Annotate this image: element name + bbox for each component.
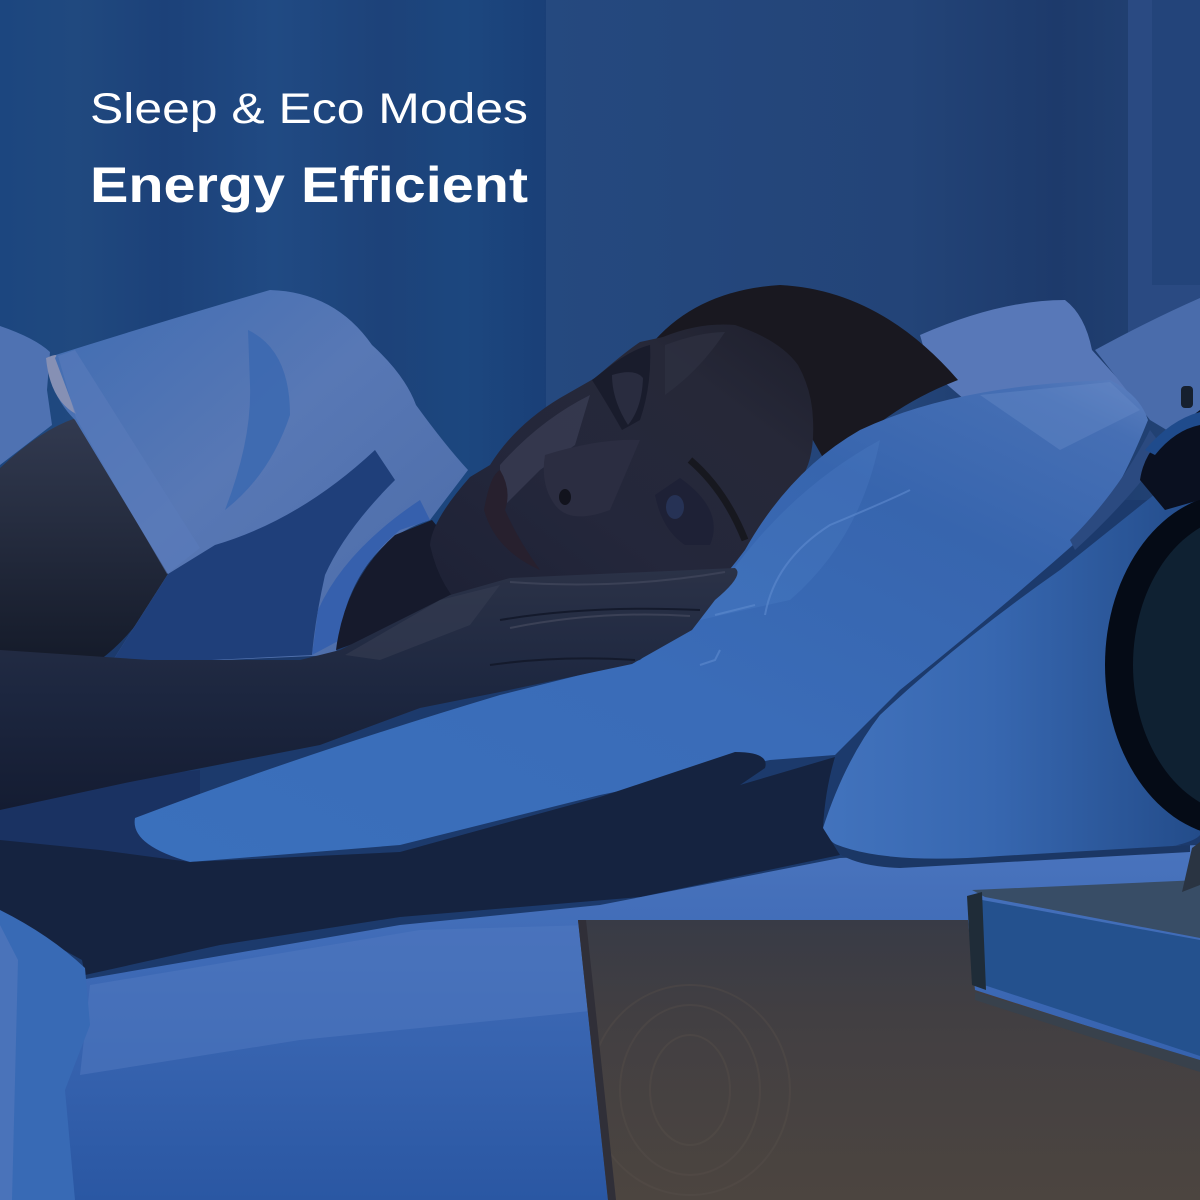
under-body shadow <box>0 770 200 870</box>
foreground bedding fold <box>0 910 90 1200</box>
finger lines <box>490 609 700 665</box>
upper eye socket <box>592 345 650 430</box>
heading: Energy Efficient: Energy Efficient <box>90 157 528 213</box>
bed sheet light patch <box>80 925 600 1075</box>
t-shirt <box>46 290 468 665</box>
neckline highlight <box>312 500 430 655</box>
finger highlights <box>510 572 725 628</box>
table left strip <box>578 920 616 1200</box>
fold highlight <box>0 925 18 1200</box>
lower eye <box>655 478 714 545</box>
blanket at left <box>0 326 52 465</box>
alarm clock <box>1105 386 1200 892</box>
sleeping woman <box>0 285 958 870</box>
nose <box>544 440 640 516</box>
upper arm <box>0 418 168 660</box>
lower torso shadow <box>110 450 395 665</box>
bed sheet <box>0 845 1200 1200</box>
lips <box>484 470 540 570</box>
hair <box>655 285 958 470</box>
face <box>430 324 813 615</box>
book <box>967 880 1200 1072</box>
background: curtain and wall <box>0 0 1200 560</box>
table wood grain <box>643 984 750 1006</box>
back pillow <box>920 300 1130 430</box>
nostril <box>559 489 571 505</box>
pillow crease highlights <box>700 490 910 665</box>
second pillow shadow <box>823 838 1190 868</box>
eyebrow <box>690 460 745 540</box>
lower arm <box>0 752 840 975</box>
pillow corner light <box>980 382 1140 450</box>
bedside table <box>578 920 1200 1200</box>
pillow upper-left glow <box>700 440 880 620</box>
far right pillow <box>1095 298 1200 450</box>
sleeve inner hem <box>46 355 76 414</box>
chest <box>336 520 490 650</box>
main pillow <box>135 380 1148 862</box>
cheek sheen <box>500 395 590 510</box>
sleeve fold <box>225 330 290 510</box>
upper eyelid <box>612 372 643 425</box>
crease between pillows <box>1070 430 1165 550</box>
temple sheen <box>665 332 725 395</box>
eyelid glint <box>666 495 684 519</box>
sleeve band <box>58 350 200 574</box>
upper forearm and hand <box>0 568 738 810</box>
second pillow <box>823 490 1200 862</box>
knuckle sheen <box>345 585 500 660</box>
title: Sleep & Eco Modes: Sleep & Eco Modes <box>90 85 528 133</box>
